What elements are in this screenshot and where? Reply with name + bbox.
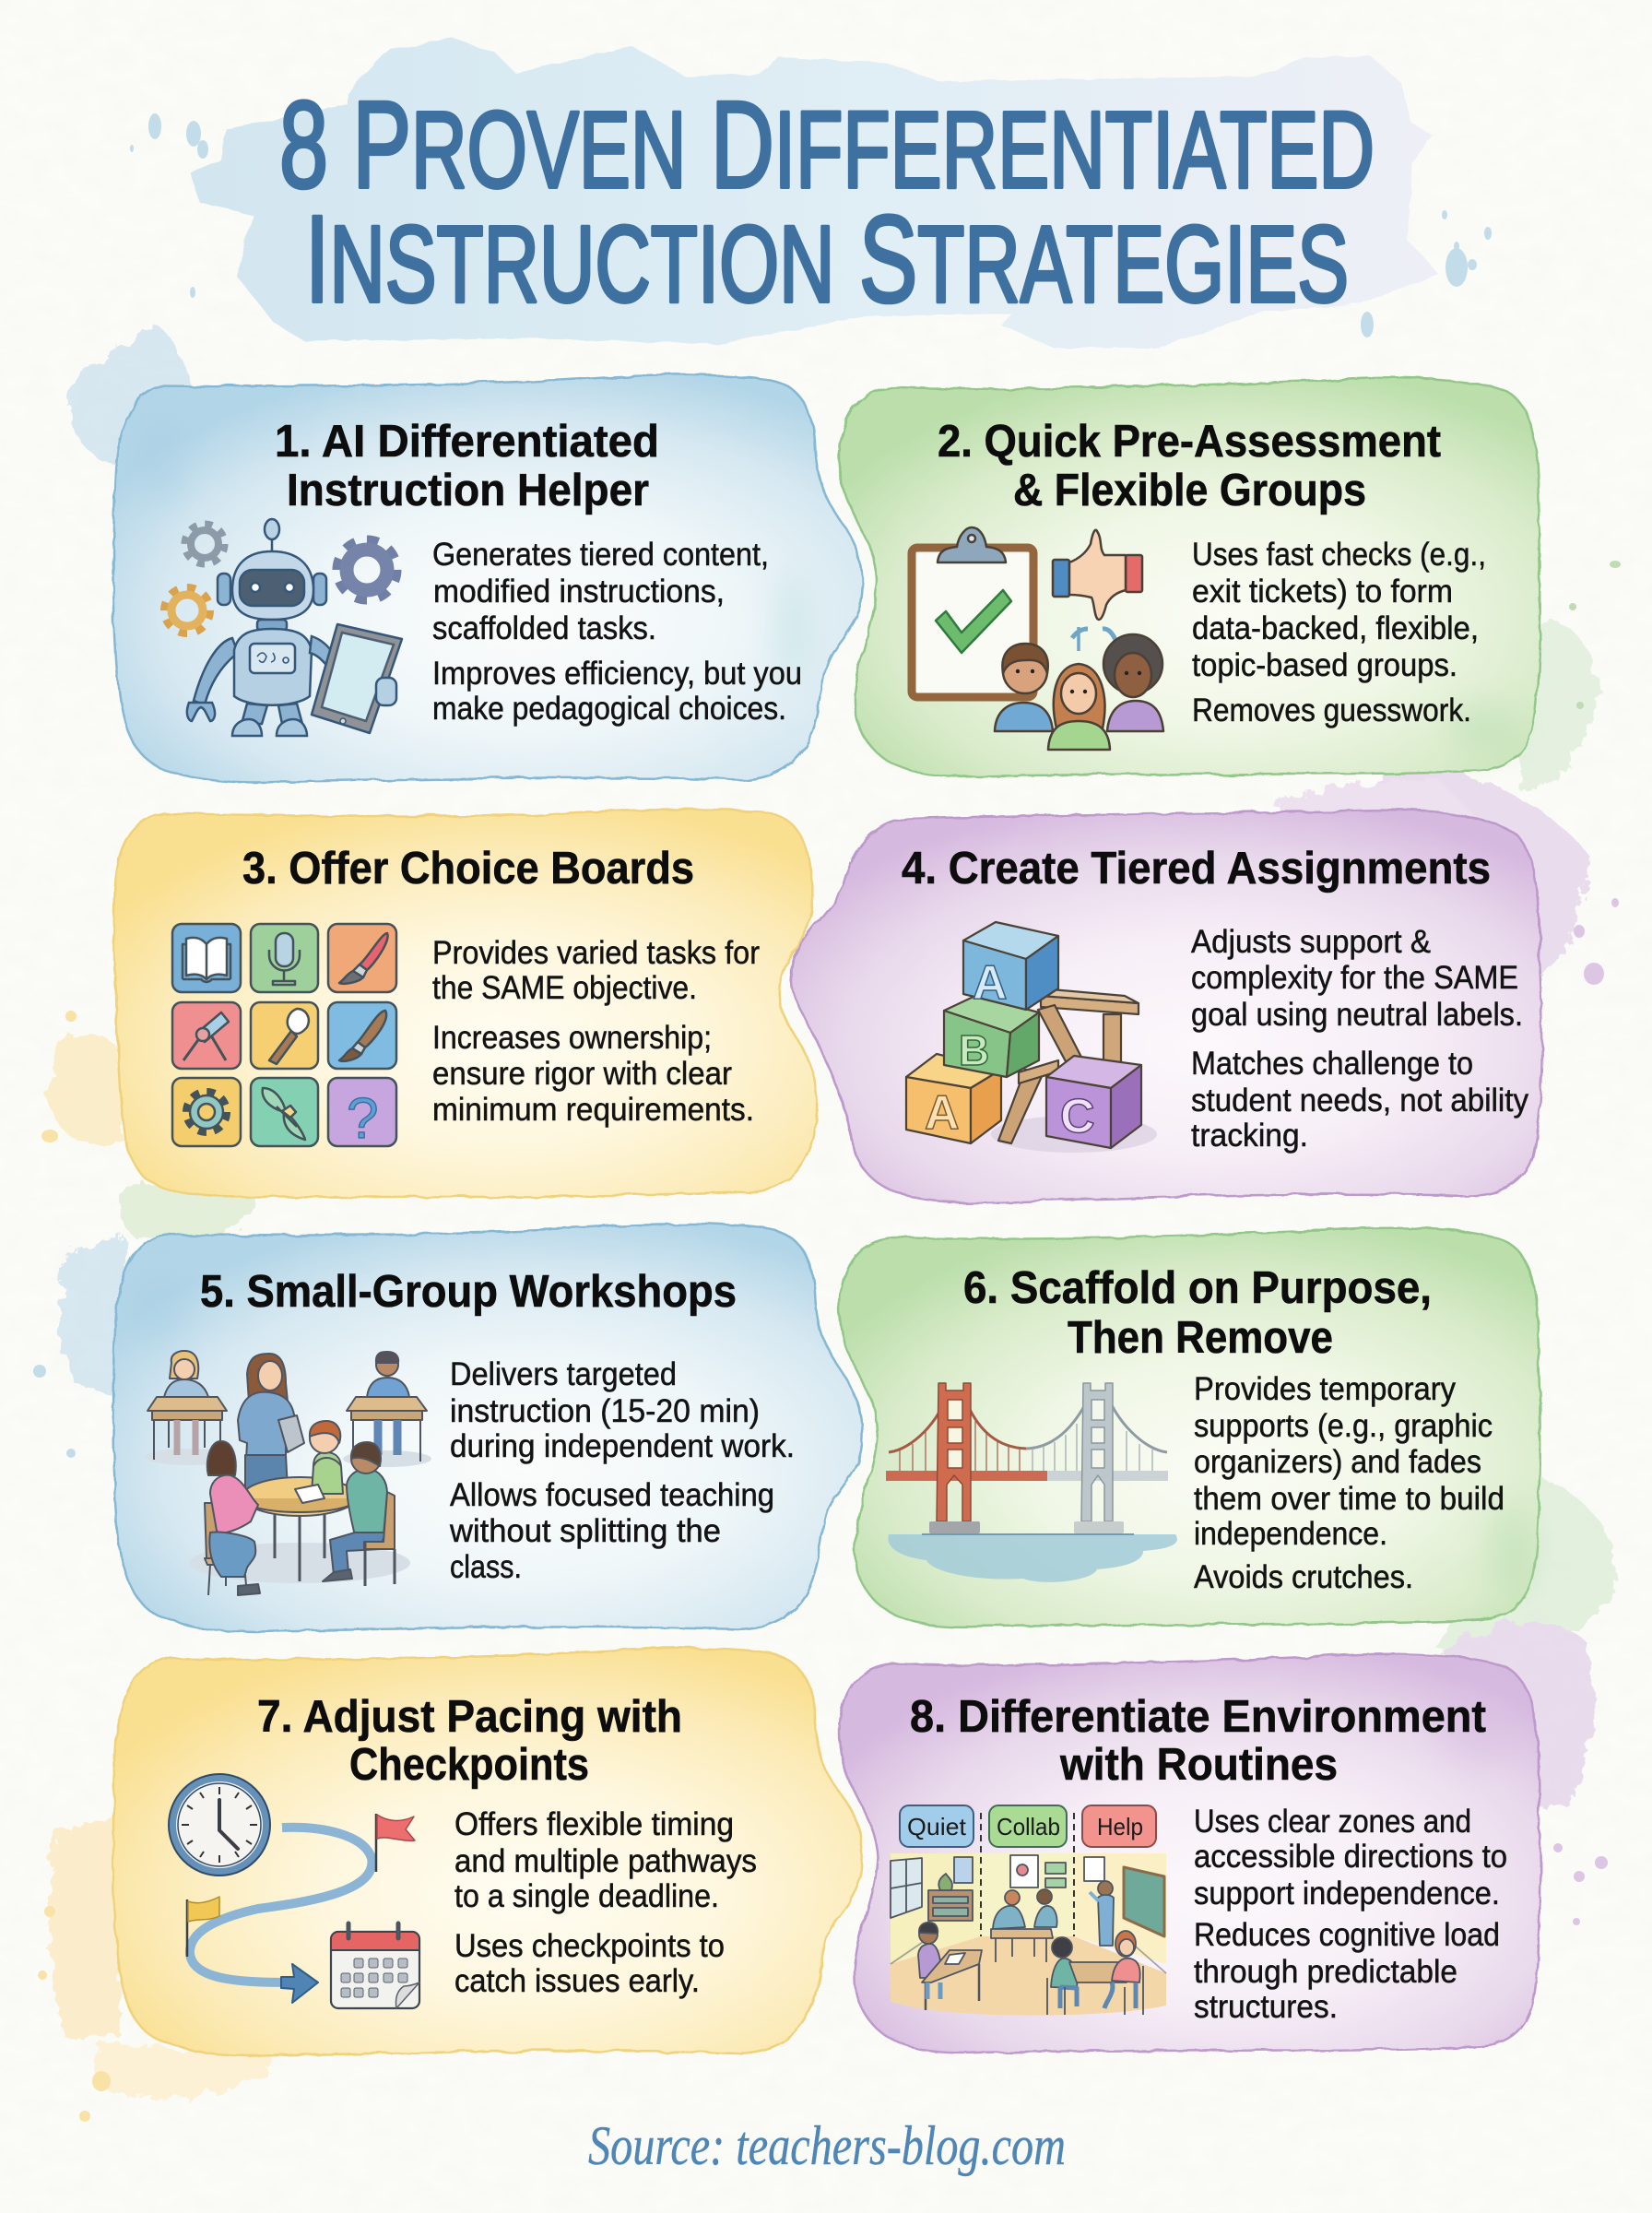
body text 8: support independence. [1194, 1876, 1500, 1911]
heading 6 [963, 1263, 1432, 1363]
panel 3: offer choice boards [114, 810, 817, 1198]
panel 5: small-group workshops [113, 1224, 863, 1631]
heading 7: 7. Adjust Pacing with [257, 1692, 682, 1742]
body text 3: Provides varied tasks for [432, 935, 760, 971]
zone labels: Quiet [907, 1813, 967, 1840]
icon: bridge fading from red to grey [886, 1383, 1177, 1582]
heading 1: Instruction Helper [287, 466, 649, 515]
body text 6: supports (e.g., graphic [1194, 1408, 1493, 1444]
zone labels: Collab [997, 1813, 1060, 1840]
heading 6: 6. Scaffold on Purpose, [963, 1263, 1432, 1313]
heading 1 [275, 417, 659, 515]
body text 4: tracking. [1191, 1118, 1308, 1154]
panel 7: adjust pacing with checkpoints [113, 1648, 863, 2055]
body text 1: Generates tiered content, [432, 537, 769, 573]
body text 8: Reduces cognitive load [1194, 1917, 1500, 1953]
body text 6: independence. [1194, 1516, 1387, 1552]
icon: grid of nine choice tiles: ? [347, 1087, 378, 1151]
body text 5: during independent work. [450, 1428, 795, 1464]
body text 6: them over time to build [1194, 1481, 1504, 1517]
body text 7: Offers flexible timing [454, 1806, 734, 1842]
icon: robot with gears and tablet [165, 519, 402, 736]
icon: stacked alphabet blocks: A [925, 1086, 960, 1140]
body text 3 [432, 935, 760, 1128]
heading 8: 8. Differentiate Environment [910, 1692, 1486, 1742]
body text 8: through predictable [1194, 1954, 1457, 1990]
icon: clipboard, thumb and student group [912, 527, 1163, 750]
body text 4: complexity for the SAME [1191, 960, 1518, 996]
body text 6: Avoids crutches. [1194, 1559, 1413, 1595]
title [279, 77, 1375, 328]
heading 8 [910, 1692, 1486, 1790]
icon: classroom with quiet, collab and help zones [891, 1805, 1166, 2016]
heading 2 [938, 417, 1441, 515]
panel 8: differentiate environment with routines [840, 1653, 1540, 2053]
body text 1: modified instructions, [433, 574, 725, 609]
body text 5: Allows focused teaching [450, 1477, 774, 1513]
body text 5: without splitting the [449, 1513, 721, 1549]
body text 1 [432, 537, 802, 727]
heading 1: 1. AI Differentiated [275, 417, 659, 467]
title: INSTRUCTION STRATEGIES [305, 191, 1349, 328]
body text 5: Delivers targeted [450, 1356, 677, 1392]
heading 5: 5. Small-Group Workshops [200, 1267, 737, 1317]
title: 8 PROVEN DIFFERENTIATED [279, 77, 1375, 214]
body text 4: goal using neutral labels. [1191, 997, 1523, 1033]
body text 6 [1194, 1371, 1504, 1595]
icon: teacher with small group at table [145, 1351, 431, 1595]
body text 4: Matches challenge to [1191, 1046, 1473, 1082]
heading 3: 3. Offer Choice Boards [242, 844, 694, 893]
body text 2: topic-based groups. [1192, 647, 1457, 683]
icon: stacked alphabet blocks: B [959, 1026, 989, 1074]
title watercolor wash [190, 39, 1438, 348]
icon: grid of nine choice tiles [172, 924, 396, 1151]
body text 8: Uses clear zones and [1194, 1804, 1471, 1840]
body text 2 [1192, 537, 1486, 728]
panel 4: create tiered assignments [791, 811, 1542, 1202]
body text 4: Adjusts support & [1191, 924, 1431, 960]
body text 7: to a single deadline. [454, 1878, 719, 1914]
body text 6: Provides temporary [1194, 1371, 1456, 1407]
body text 8: structures. [1194, 1989, 1338, 2025]
panel 2: quick pre-assessment and flexible groups [840, 377, 1540, 776]
heading 7: Checkpoints [349, 1740, 589, 1790]
icon: stacked alphabet blocks: A [973, 956, 1008, 1010]
body text 3: Increases ownership; [432, 1020, 712, 1056]
body text 8: accessible directions to [1194, 1839, 1507, 1875]
zone labels: Help [1097, 1813, 1143, 1840]
heading 4: 4. Create Tiered Assignments [902, 844, 1491, 893]
body text 5: class. [450, 1549, 522, 1585]
body text 7: catch issues early. [454, 1963, 700, 1999]
body text 7: Uses checkpoints to [454, 1928, 725, 1964]
body text 8 [1194, 1804, 1507, 2025]
body text 3: ensure rigor with clear [432, 1056, 732, 1092]
body text 1: Improves efficiency, but you [432, 656, 802, 692]
zone labels [900, 1805, 1156, 1847]
body text 1: scaffolded tasks. [432, 610, 656, 646]
heading 2: & Flexible Groups [1013, 466, 1366, 515]
body text 4: student needs, not ability [1191, 1083, 1528, 1118]
heading 8: with Routines [1059, 1740, 1338, 1790]
body text 3: minimum requirements. [432, 1092, 754, 1128]
icon: stacked alphabet blocks [906, 922, 1157, 1153]
body text 5: instruction (15-20 min) [450, 1393, 760, 1429]
heading 7 [257, 1692, 682, 1790]
body text 7 [454, 1806, 757, 1999]
panel 1: AI differentiated instruction helper [113, 374, 863, 782]
source credit: Source: teachers-blog.com [588, 2115, 1066, 2176]
body text 3: the SAME objective. [432, 970, 697, 1006]
heading 2: 2. Quick Pre-Assessment [938, 417, 1441, 467]
body text 4 [1191, 924, 1528, 1154]
body text 2: Removes guesswork. [1192, 692, 1471, 728]
icon: clock, winding path, flags and calendar [169, 1774, 419, 2008]
body text 5 [449, 1356, 795, 1585]
body text 6: organizers) and fades [1194, 1444, 1481, 1480]
body text 7: and multiple pathways [454, 1843, 757, 1879]
body text 2: Uses fast checks (e.g., [1192, 537, 1486, 573]
background watercolor splashes [46, 323, 1614, 2099]
icon: stacked alphabet blocks: C [1060, 1090, 1095, 1143]
heading 6: Then Remove [1068, 1313, 1333, 1363]
body text 2: exit tickets) to form [1192, 574, 1453, 609]
body text 1: make pedagogical choices. [432, 691, 786, 727]
body text 2: data-backed, flexible, [1192, 610, 1479, 646]
panel 6: scaffold on purpose then remove [840, 1227, 1540, 1627]
